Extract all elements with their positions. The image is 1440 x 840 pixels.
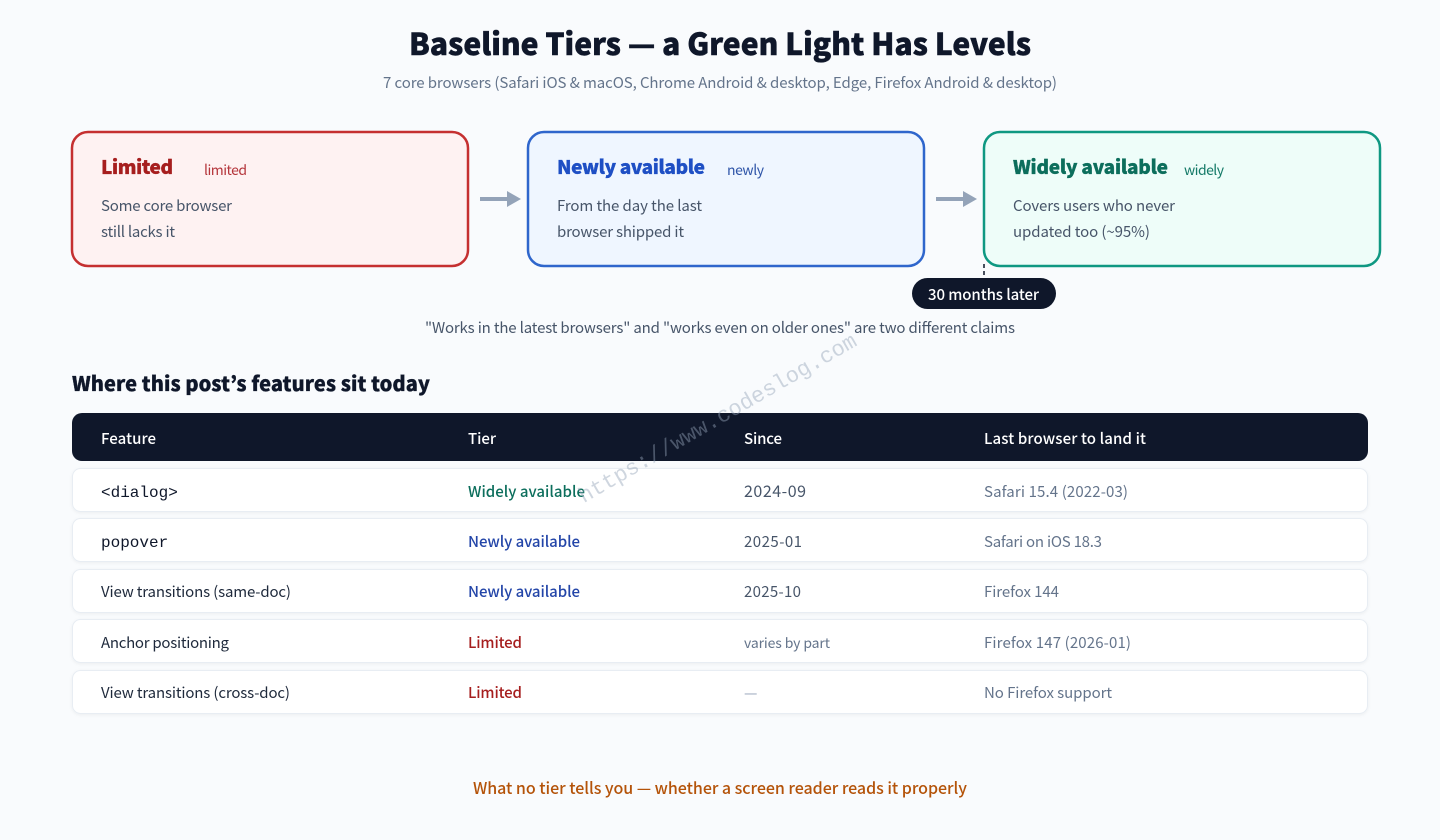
row: cross-doc view transitions: View transitions (cross-doc) xyxy=(101,682,290,703)
caption: "Works in the latest browsers" and "works even on older ones" are two different claims xyxy=(425,317,1015,338)
description: widely: updated too (~95%) xyxy=(1013,221,1150,242)
row: dialog: 2024-09 xyxy=(744,478,806,502)
panel: widely available tier xyxy=(984,132,1380,266)
row: same-doc view transitions: Newly available xyxy=(468,581,580,602)
row: anchor positioning: Anchor positioning xyxy=(101,632,230,653)
row: dialog: Safari 15.4 (2022-03) xyxy=(984,481,1128,502)
row: popover xyxy=(72,518,1368,562)
heading: newly: Newly available xyxy=(557,153,705,180)
row: anchor positioning: Firefox 147 (2026-01) xyxy=(984,632,1131,653)
table header: Tier xyxy=(468,428,497,449)
row: cross-doc view transitions xyxy=(72,670,1368,714)
row: dialog: <dialog> xyxy=(101,484,178,502)
row: cross-doc view transitions: Limited xyxy=(468,682,522,703)
pill: 30 months later xyxy=(912,278,1056,309)
row: popover: 2025-01 xyxy=(744,531,802,552)
description: limited: still lacks it xyxy=(101,221,175,242)
description: newly xyxy=(557,195,702,242)
connector: dashed line to pill xyxy=(983,264,985,279)
pill: 30 months later: 30 months later xyxy=(928,284,1040,305)
subtitle: 7 core browsers (Safari iOS & macOS, Chrome Android & desktop, Edge, Firefox Android & desktop) xyxy=(383,72,1057,93)
row: dialog xyxy=(72,468,1368,512)
heading: widely: Widely available xyxy=(1013,153,1168,180)
panel: newly available tier xyxy=(528,132,924,266)
row: cross-doc view transitions: — xyxy=(744,682,757,703)
section heading: Where this post’s features sit today xyxy=(72,368,430,397)
row: same-doc view transitions xyxy=(72,570,1368,612)
description: widely xyxy=(1013,195,1175,242)
row: popover: Safari on iOS 18.3 xyxy=(984,531,1102,552)
row: popover: Newly available xyxy=(468,531,580,552)
arrow: limited to newly xyxy=(480,191,521,207)
description: widely: Covers users who never xyxy=(1013,195,1175,216)
tag: widely: widely xyxy=(1184,160,1225,180)
title: Baseline Tiers — a Green Light Has Levels xyxy=(409,20,1031,64)
table xyxy=(72,413,1368,714)
row: anchor positioning: varies by part xyxy=(744,633,831,653)
watermark: https://www.codeslog.com xyxy=(575,329,862,509)
row: popover: popover xyxy=(101,534,168,552)
tag: newly: newly xyxy=(727,160,765,180)
tag: limited: limited xyxy=(204,160,247,180)
table header: Last browser to land it xyxy=(984,428,1146,449)
table header: Feature xyxy=(101,428,156,449)
description: limited xyxy=(101,195,232,242)
heading: limited: Limited xyxy=(101,153,173,180)
description: newly: From the day the last xyxy=(557,195,702,216)
row: dialog: Widely available xyxy=(468,481,585,502)
table header xyxy=(72,413,1368,461)
description: limited: Some core browser xyxy=(101,195,232,216)
row: anchor positioning: Limited xyxy=(468,632,522,653)
row: same-doc view transitions: Firefox 144 xyxy=(984,581,1059,602)
row: anchor positioning xyxy=(72,620,1368,662)
description: newly: browser shipped it xyxy=(557,221,684,242)
panel: limited tier xyxy=(72,132,468,266)
row: same-doc view transitions: 2025-10 xyxy=(744,581,801,602)
arrow: newly to widely xyxy=(936,191,977,207)
row: same-doc view transitions: View transitions (same-doc) xyxy=(101,581,291,602)
row: cross-doc view transitions: No Firefox support xyxy=(984,682,1112,703)
table header: Since xyxy=(744,428,782,449)
footer callout: What no tier tells you — whether a screen reader reads it properly xyxy=(473,775,967,799)
